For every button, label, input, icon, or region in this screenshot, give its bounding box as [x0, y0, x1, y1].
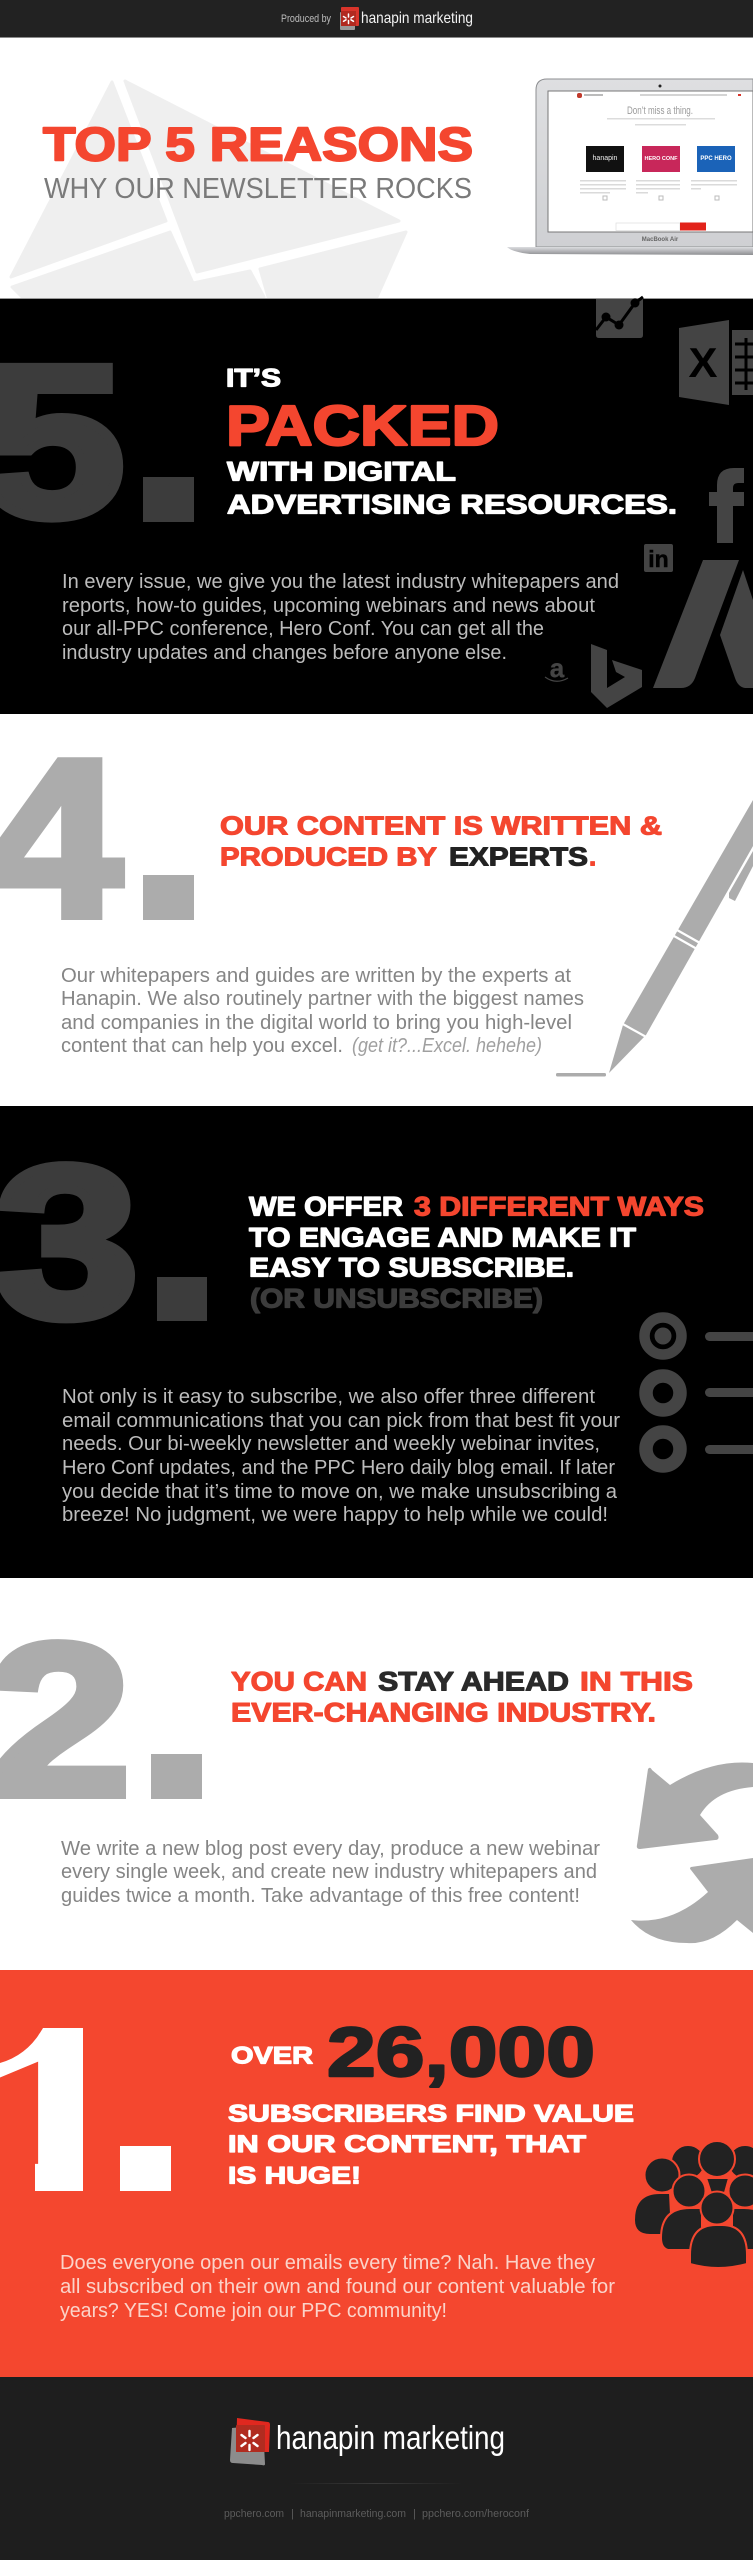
- heading: our content is written and produced by experts: OUR CONTENT IS WRITTEN &: [220, 810, 662, 840]
- panel: top producer bar: [0, 0, 753, 38]
- heading: over 26,000 subscribers: 26,000: [327, 2013, 595, 2091]
- icon: crowd of people: [634, 2141, 753, 2268]
- heading: we offer 3 different ways: 3 DIFFERENT WAYS: [414, 1192, 704, 1222]
- image: laptop with newsletter page: HERO CONF: [644, 156, 678, 162]
- heading: you can stay ahead: STAY AHEAD: [378, 1666, 569, 1696]
- icon: excel: [679, 320, 753, 405]
- heading: we offer 3 different ways: TO ENGAGE AND MAKE IT: [249, 1222, 636, 1252]
- image: laptop with newsletter page: hanapin: [593, 155, 618, 162]
- body text: our all-PPC conference, Hero Conf. You can get all the: [62, 618, 544, 640]
- heading: over 26,000 subscribers: [228, 2013, 634, 2190]
- body text: [61, 1838, 600, 1907]
- icon: refresh arrows: [631, 1762, 753, 1943]
- heading: it's packed with digital advertising resources: IT’S: [226, 364, 281, 392]
- icon: adwords: [653, 560, 753, 688]
- heading: it's packed with digital advertising resources: ADVERTISING RESOURCES.: [227, 490, 677, 520]
- icon: amazon: a: [550, 653, 565, 683]
- heading: over 26,000 subscribers: IN OUR CONTENT, THAT: [228, 2131, 586, 2158]
- heading: we offer 3 different ways: EASY TO SUBSCRIBE.: [249, 1252, 574, 1282]
- icon: linkedin: [644, 544, 673, 572]
- numeral dot: [120, 2146, 171, 2191]
- heading: you can stay ahead: [231, 1666, 693, 1728]
- numeral dot: [157, 1277, 207, 1321]
- icon: hanapin logo: [230, 2418, 270, 2465]
- icon: analytics chart: [596, 297, 643, 338]
- body text: In every issue, we give you the latest industry whitepapers and: [62, 571, 619, 593]
- image: laptop with newsletter page: Don’t miss a thing.: [627, 105, 693, 117]
- heading: you can stay ahead: EVER-CHANGING INDUSTRY.: [231, 1698, 656, 1728]
- numeral dot: [143, 477, 194, 522]
- body text: email communications that you can pick from that best fit your: [62, 1410, 620, 1432]
- body text: content that can help you excel.: [61, 1035, 343, 1057]
- text: footer links: ppchero.com/heroconf: [422, 2508, 530, 2520]
- heading: we offer 3 different ways: WE OFFER: [249, 1192, 403, 1222]
- body text: [62, 1386, 620, 1526]
- body text: reports, how-to guides, upcoming webinars and news about: [62, 595, 595, 617]
- body text: Does everyone open our emails every time? Nah. Have they: [60, 2252, 595, 2274]
- body text: (get it?...Excel. hehehe): [352, 1035, 542, 1057]
- panel: reason 4: [0, 713, 753, 1106]
- body text: guides twice a month. Take advantage of this free content!: [61, 1885, 580, 1907]
- body text: Hero Conf updates, and the PPC Hero daily blog email. If later: [62, 1457, 615, 1479]
- heading: you can stay ahead: IN THIS: [580, 1666, 693, 1696]
- heading: top 5 reasons: TOP 5 REASONS: [43, 118, 473, 170]
- heading: we offer 3 different ways: [249, 1192, 704, 1314]
- panel: reason 3: [0, 1106, 753, 1578]
- panel: hero: [0, 38, 753, 299]
- subheading: why our newsletter rocks: WHY OUR NEWSLETTER ROCKS: [44, 173, 472, 205]
- panel: reason 1: [0, 1970, 753, 2377]
- heading: our content is written and produced by experts: [220, 810, 662, 872]
- icon: amazon: [545, 653, 568, 683]
- body text: Not only is it easy to subscribe, we also offer three different: [62, 1386, 595, 1408]
- image: laptop with newsletter page: [507, 79, 753, 255]
- body text: industry updates and changes before anyone else.: [62, 642, 507, 664]
- heading: our content is written and produced by experts: PRODUCED BY: [220, 842, 437, 872]
- body text: needs. Our bi-weekly newsletter and weekly webinar invites,: [62, 1433, 600, 1455]
- numeral dot: [151, 1754, 202, 1799]
- icon: linkedin: in: [648, 546, 669, 572]
- text: hanapin marketing small: hanapin marketing: [361, 10, 473, 27]
- body text: you decide that it’s time to move on, we make unsubscribing a: [62, 1481, 618, 1503]
- heading: over 26,000 subscribers: SUBSCRIBERS FIND VALUE: [228, 2100, 634, 2128]
- heading: it's packed with digital advertising resources: PACKED: [226, 394, 499, 458]
- body text: and companies in the digital world to bring you high-level: [61, 1012, 572, 1034]
- body text: years? YES! Come join our PPC community!: [60, 2300, 447, 2322]
- icon: excel: X: [688, 339, 718, 386]
- body text: Our whitepapers and guides are written by the experts at: [61, 965, 571, 987]
- icon: hanapin logo small: [340, 7, 359, 30]
- panel: reason 5: [0, 297, 753, 714]
- body text: every single week, and create new industry whitepapers and: [61, 1861, 597, 1883]
- image: laptop with newsletter page: MacBook Air: [642, 237, 679, 243]
- icon: envelope watermark: [11, 81, 406, 297]
- text: produced by: Produced by: [281, 13, 331, 25]
- heading: over 26,000 subscribers: OVER: [231, 2042, 313, 2070]
- heading: it's packed with digital advertising resources: [226, 364, 677, 520]
- text: hanapin marketing wordmark: hanapin marketing: [276, 2419, 505, 2456]
- heading: our content is written and produced by experts: .: [589, 842, 596, 872]
- body text: We write a new blog post every day, produce a new webinar: [61, 1838, 600, 1860]
- text: footer links: |: [291, 2508, 294, 2520]
- text: footer links: |: [413, 2508, 416, 2520]
- heading: you can stay ahead: YOU CAN: [231, 1666, 367, 1696]
- icon: bing: [591, 644, 642, 708]
- heading: our content is written and produced by experts: EXPERTS: [449, 842, 588, 872]
- body text: Hanapin. We also routinely partner with the biggest names: [61, 988, 584, 1010]
- image: laptop with newsletter page: PPC HERO: [700, 156, 732, 162]
- icon: three option radio list: [644, 1318, 753, 1466]
- numeral dot: [143, 875, 194, 920]
- body text: [62, 571, 619, 664]
- icon: pen: [556, 800, 753, 1076]
- body text: breeze! No judgment, we were happy to help while we could!: [62, 1504, 608, 1526]
- heading: over 26,000 subscribers: IS HUGE!: [228, 2162, 361, 2190]
- body text: all subscribed on their own and found our content valuable for: [60, 2276, 615, 2298]
- panel: footer: [0, 2377, 753, 2560]
- text: footer links: [224, 2508, 530, 2520]
- panel: reason 2: [0, 1578, 753, 1970]
- body text: [61, 965, 584, 1057]
- text: footer links: hanapinmarketing.com: [300, 2508, 406, 2520]
- text: footer links: ppchero.com: [224, 2508, 284, 2520]
- icon: facebook: [709, 468, 744, 543]
- body text: [60, 2252, 615, 2322]
- heading: we offer 3 different ways: (OR UNSUBSCRIBE): [250, 1284, 543, 1314]
- heading: it's packed with digital advertising resources: WITH DIGITAL: [227, 456, 456, 486]
